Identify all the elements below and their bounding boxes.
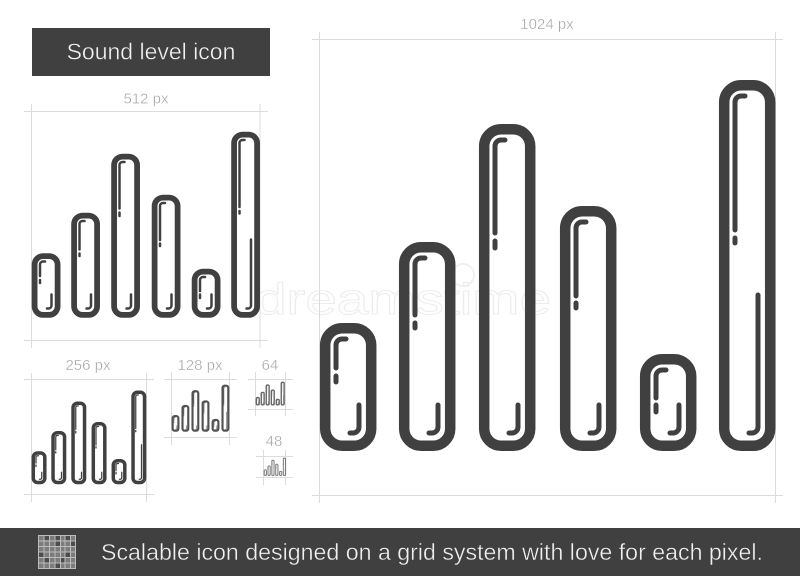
panel: 64 px icon [248,357,293,416]
icon: sound level, 256 px [33,392,145,482]
panel: 512 px icon [24,90,268,348]
icon: sound level, large [325,85,770,446]
size label: 64: 64 [262,357,278,374]
icon: sound level, 128 px [173,386,228,431]
footer bar [0,528,800,576]
watermark: dreamstime [255,275,551,324]
icon: sound level, 64 px [256,382,284,405]
title: Sound level icon [67,38,235,64]
size label: 48: 48 [266,433,282,450]
size label: 1024 px: 1024 px [520,16,574,33]
icon: sound level, 512 px [35,135,257,315]
icon: sound level, 48 px [264,458,286,475]
size label: 256 px: 256 px [65,357,111,374]
watermark [255,264,551,324]
icon: pixel grid [38,535,76,569]
title banner [32,28,270,76]
panel: 48 px icon [256,433,293,485]
size label: 128 px: 128 px [177,357,223,374]
panel: 128 px icon [164,357,237,445]
size label: 512 px: 512 px [123,90,169,108]
footer caption: Scalable icon designed on a grid system with love for each pixel. [101,539,763,565]
panel: 256 px icon [24,357,154,502]
